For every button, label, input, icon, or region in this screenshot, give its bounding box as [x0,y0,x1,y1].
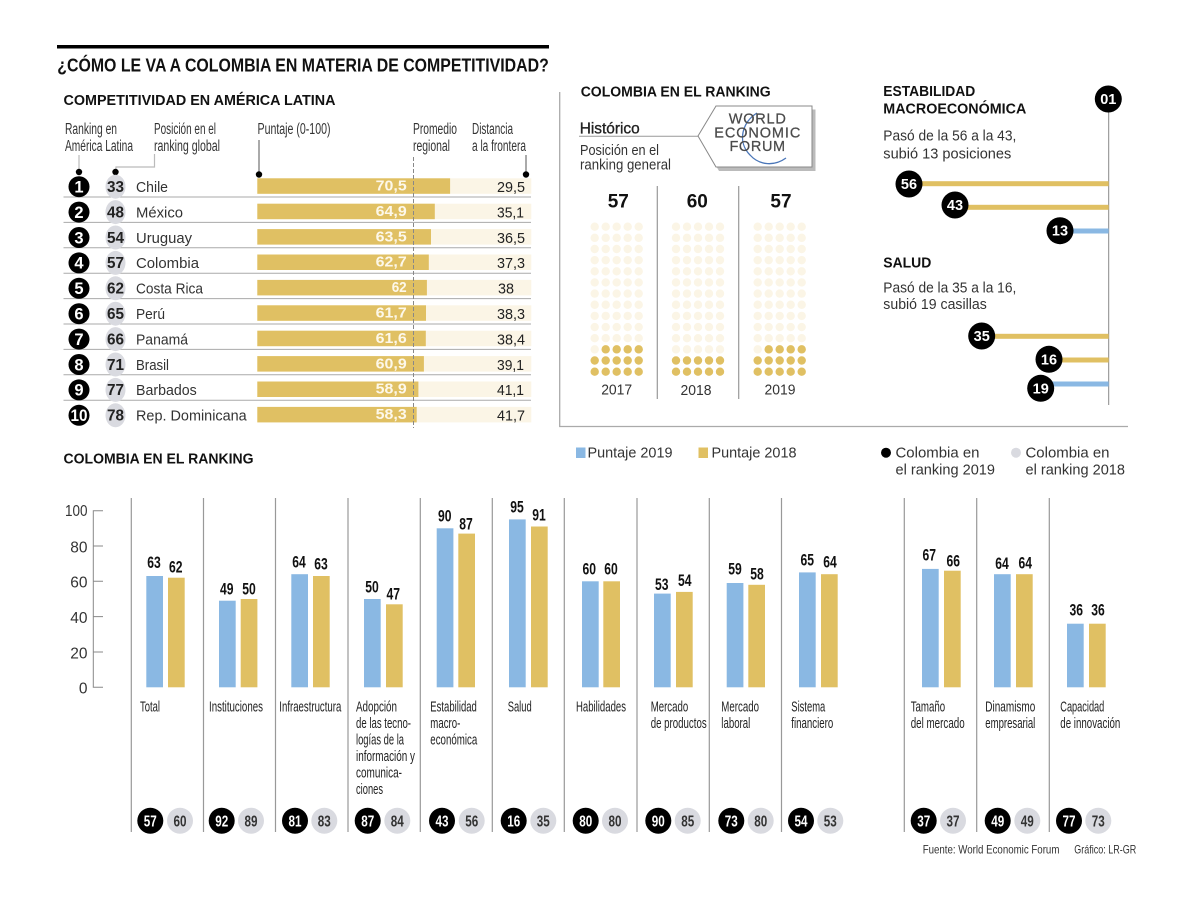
group: Infraestructura: 81 [288,813,302,830]
group: Sistema financiero [788,551,843,834]
row: Chile: 29,5 [497,179,525,196]
group: Infraestructura: 83 [318,813,331,830]
row: Rep. Dominicana: 41,7 [497,408,525,425]
text: estabilidad macroeconómica: MACROECONÓMICA [883,99,1027,117]
group: Tamaño del mercado: del mercado [911,716,965,732]
row: Chile: 33 [107,179,124,196]
group: Adopción TIC [355,579,416,834]
dot column: 2017: 57 [608,192,629,213]
lollipop: 56: 56 [901,177,917,193]
legend: el ranking 2019 [896,462,995,478]
dot column: 2019 [758,192,802,398]
group: Capacidad de innovación: 36 [1070,602,1083,620]
text: salud: SALUD [883,256,931,272]
group: Estabilidad macroeconómica: 87 [459,515,473,533]
group: Infraestructura: Infraestructura [279,700,342,716]
group: Tamaño del mercado: 67 [923,546,936,564]
y axis: 0 [79,680,88,697]
row: Costa Rica: 62 [107,281,124,298]
dot column: 2018 [676,192,720,399]
group: Mercado laboral: 59 [728,561,742,579]
row: Panamá: 61,6 [376,330,407,347]
y axis: 60 [70,575,88,592]
group: Adopción TIC: ciones [356,782,383,798]
lollipop: 43 [942,192,1109,218]
subheading: histórico: Posición en el [580,143,659,159]
group: Mercado de productos [645,572,707,834]
legend: Puntaje 2019 [588,445,672,461]
row: Perú: 6 [74,306,84,324]
column header: posición global: Posición en el [154,121,216,138]
group: Capacidad de innovación: 77 [1062,813,1076,830]
row: Chile: 1 [74,178,84,196]
icon: World Economic Forum logo: FORUM [729,139,785,155]
marker: 01: 01 [1100,92,1116,108]
group: Salud: Salud [508,700,532,716]
row: Colombia: 37,3 [497,255,525,272]
group: Adopción TIC: 87 [361,813,374,830]
heading: competitividad: COMPETITIVIDAD EN AMÉRICA LATINA [64,92,336,109]
source credit: Fuente: World Economic Forum [923,842,1059,856]
group: Salud: 35 [537,813,550,830]
group: Instituciones: 49 [220,581,233,599]
row: Brasil: 71 [107,357,124,374]
group: Mercado laboral: Mercado [721,700,759,716]
row: Costa Rica [68,276,531,300]
column header: ranking América Latina: América Latina [65,138,133,155]
source credit: Gráfico: LR-GR [1074,842,1137,856]
row: Colombia: Colombia [136,255,200,272]
group: Adopción TIC: 47 [387,586,400,604]
y axis: 20 [70,645,88,662]
row: Uruguay: 63,5 [376,228,407,245]
lollipop: 13: 13 [1052,224,1068,240]
column header: promedio regional: regional [413,138,450,155]
group: Infraestructura [279,554,342,834]
lollipop: 13 [1046,217,1109,244]
column header: distancia a la frontera: Distancia [472,121,513,138]
group: Dinamismo empresarial: Dinamismo [985,700,1035,716]
legend: Colombia en [1026,445,1110,461]
row: Brasil: Brasil [136,357,169,374]
group: Tamaño del mercado: 37 [917,813,930,830]
group: Mercado de productos: 85 [681,813,694,830]
panel: competitividad en América Latina [64,92,531,428]
row: Costa Rica: Costa Rica [136,281,204,298]
lollipop: 35 [968,322,1109,350]
y axis [65,503,103,697]
column header: posición global [112,121,220,175]
group: Sistema financiero: financiero [791,716,833,732]
panel: pilares destacados [883,84,1122,405]
row: Perú: 65 [107,306,124,323]
row: México: 48 [107,204,124,221]
column header: distancia a la frontera: a la frontera [472,138,526,155]
row: Barbados: Barbados [136,382,197,399]
row: Chile: Chile [136,179,168,196]
row: Perú: 38,3 [497,306,525,323]
lollipop: 56 [896,170,1109,198]
text: estabilidad macroeconómica [883,84,1027,162]
row: Chile: 70,5 [376,178,407,194]
group: Dinamismo empresarial: empresarial [985,716,1035,732]
group: Habilidades: Habilidades [576,700,626,716]
group: Capacidad de innovación: de innovación [1060,716,1120,732]
row: Costa Rica: 5 [74,280,84,298]
row: Rep. Dominicana: 10 [70,407,88,425]
row: Brasil: 8 [74,356,84,374]
row: Brasil [68,352,531,376]
subheading: histórico: ranking general [580,158,671,174]
group: Infraestructura: 63 [314,555,328,573]
row: Barbados [68,378,531,402]
dot column: 2017: 2017 [601,382,632,398]
group: Adopción TIC: comunica- [356,766,402,782]
row: Colombia: 62,7 [376,254,407,271]
dot column: 2018: 60 [687,192,708,213]
row: Panamá: 38,4 [497,331,525,348]
group: Estabilidad macroeconómica: económica [430,732,478,748]
group: Habilidades: 60 [583,561,596,579]
group: Estabilidad macroeconómica [429,508,485,834]
group: Mercado de productos: 54 [678,572,692,590]
dot column: 2017 [595,192,639,398]
group: Sistema financiero: Sistema [791,700,826,716]
group: Tamaño del mercado: 66 [947,552,960,570]
group: Estabilidad macroeconómica: Estabilidad [430,700,477,716]
group: Mercado de productos: Mercado [651,700,688,716]
text: salud [883,256,1016,313]
bar chart: Colombia en el ranking [65,498,1120,834]
group: Sistema financiero: 53 [824,813,837,830]
row: Perú [68,302,531,326]
row: Panamá: Panamá [136,331,189,348]
text: estabilidad macroeconómica: ESTABILIDAD [883,84,975,100]
row: Colombia: 57 [107,255,124,272]
group: Instituciones: 92 [215,813,228,830]
row: Rep. Dominicana: 58,3 [376,406,407,423]
row: Uruguay: 54 [107,230,124,247]
y axis: 40 [70,610,88,627]
subheading: histórico: Histórico [580,120,640,137]
group: Mercado de productos: 90 [652,813,665,830]
lollipop: 43: 43 [947,198,963,214]
row: México: 35,1 [497,204,524,221]
row: Costa Rica: 38 [498,281,514,298]
panel: Colombia en el ranking histórico [579,85,816,399]
row: México: México [136,204,183,221]
group: Salud: 16 [507,813,520,830]
row: Rep. Dominicana [68,403,531,427]
row: Chile [68,175,531,199]
row: Colombia [68,251,531,275]
group: Capacidad de innovación: 73 [1092,813,1105,830]
row: Barbados: 77 [107,382,124,399]
group: Instituciones: 89 [244,813,258,830]
group: Habilidades: 80 [608,813,622,830]
group: Adopción TIC: Adopción [356,700,397,716]
group: Habilidades: 80 [579,813,592,830]
group: Dinamismo empresarial: 64 [1019,555,1033,573]
group: Sistema financiero: 64 [823,554,837,572]
row: Rep. Dominicana: 78 [107,408,124,425]
row: Perú: 61,7 [376,304,407,322]
group: Mercado laboral: 80 [754,813,767,830]
group: Mercado laboral: laboral [721,716,750,732]
group: Instituciones: Instituciones [209,700,263,716]
icon: World Economic Forum logo: WORLD [729,111,786,127]
heading: histórico ranking: COLOMBIA EN EL RANKING [581,85,771,101]
group: Instituciones [209,581,264,834]
icon: World Economic Forum logo [698,106,816,171]
group: Total [137,554,193,834]
row: México [68,200,531,224]
group: Estabilidad macroeconómica: 90 [438,508,451,526]
group: Tamaño del mercado: Tamaño [911,700,945,716]
row: Uruguay: 3 [74,229,84,247]
group: Salud [501,499,556,834]
group: Tamaño del mercado: 37 [946,813,960,830]
marker: 01 [1095,86,1122,112]
group: Estabilidad macroeconómica: 56 [465,813,478,830]
dot column: 2019: 2019 [764,382,796,398]
group: Mercado de productos: 53 [655,576,668,594]
group: Capacidad de innovación: 36 [1091,602,1105,620]
group: Infraestructura: 64 [292,554,306,572]
group: Adopción TIC: información y [356,749,416,765]
legend [576,445,1125,478]
row: Barbados: 9 [74,382,84,400]
row: Uruguay: 36,5 [497,230,525,247]
lollipop: 35: 35 [974,329,990,345]
row: México: 2 [74,204,84,222]
lollipop: 16: 16 [1041,352,1057,368]
group: Tamaño del mercado [911,546,966,834]
title: ¿CÓMO LE VA A COLOMBIA EN MATERIA DE COMPETITIVIDAD? [57,55,549,76]
column header: promedio regional [413,121,457,155]
group: Salud: 95 [510,499,524,517]
column header: distancia a la frontera [472,121,529,178]
legend: Puntaje 2018 [712,445,796,461]
text: estabilidad macroeconómica: subió 13 posiciones [883,146,1011,162]
row: Uruguay [68,226,531,250]
icon: World Economic Forum logo: ECONOMIC [714,126,800,142]
group: Total: 62 [169,559,182,577]
group: Mercado de productos: de productos [651,716,707,732]
group: Salud: 91 [532,507,546,525]
column header: ranking América Latina [65,121,133,175]
legend: el ranking 2018 [1026,462,1125,478]
group: Capacidad de innovación [1056,602,1120,834]
row: Rep. Dominicana: Rep. Dominicana [136,408,247,425]
row: Costa Rica: 62 [392,279,407,296]
group: Capacidad de innovación: Capacidad [1060,700,1104,716]
group: Habilidades: 60 [604,561,618,579]
row: Barbados: 41,1 [497,382,524,399]
group: Estabilidad macroeconómica: 43 [436,813,449,830]
group: Adopción TIC: de las tecno- [356,716,411,732]
group: Sistema financiero: 54 [794,813,808,830]
group: Dinamismo empresarial [985,555,1040,834]
column header: posición global: ranking global [154,138,220,155]
lollipop: 16 [1036,346,1109,373]
lollipop: 19 [1027,375,1109,402]
heading: Colombia en el ranking: COLOMBIA EN EL RANKING [64,451,254,467]
top rule [57,45,549,48]
text: salud: Pasó de la 35 a la 16, [883,280,1016,296]
dot column: 2019: 57 [770,192,792,213]
column header: puntaje: Puntaje (0-100) [258,121,330,138]
group: Adopción TIC: 84 [391,813,404,830]
group: Total: 63 [147,554,161,572]
group: Adopción TIC: logías de la [356,732,405,748]
group: Mercado laboral: 58 [750,565,764,583]
group: Adopción TIC: 50 [365,579,379,597]
row: Brasil: 60,9 [376,355,407,372]
group: Total: 60 [174,813,187,830]
subheading: histórico [579,120,698,174]
row: Barbados: 58,9 [376,381,407,398]
group: Total: Total [140,700,160,716]
group: Sistema financiero: 65 [801,551,814,569]
group: Instituciones: 50 [242,581,256,599]
text: salud: subió 19 casillas [883,297,987,313]
lollipop: 19: 19 [1033,381,1049,397]
row: México: 64,9 [376,203,407,220]
group: Dinamismo empresarial: 49 [1021,813,1034,830]
dot column: 2018: 2018 [680,383,712,399]
group: Mercado laboral [718,561,774,834]
group: Habilidades [573,561,628,834]
group: Estabilidad macroeconómica: macro- [430,716,460,732]
row: Panamá [68,327,531,351]
row: Brasil: 39,1 [497,357,524,374]
group: Dinamismo empresarial: 64 [995,555,1009,573]
text: estabilidad macroeconómica: Pasó de la 56 a la 43, [883,129,1016,145]
group: Mercado laboral: 73 [725,813,738,830]
row: Uruguay: Uruguay [136,230,192,247]
row: Colombia: 4 [74,255,84,273]
legend: Colombia en [896,445,980,461]
y axis: 80 [70,539,88,556]
y axis: 100 [65,503,88,520]
column header: promedio regional: Promedio [413,121,457,138]
group: Total: 57 [144,813,157,830]
column header: puntaje [256,121,330,178]
column header: ranking América Latina: Ranking en [65,121,117,138]
group: Dinamismo empresarial: 49 [991,813,1004,830]
row: Perú: Perú [136,306,165,323]
row: Panamá: 7 [74,331,84,349]
row: Panamá: 66 [107,331,124,348]
